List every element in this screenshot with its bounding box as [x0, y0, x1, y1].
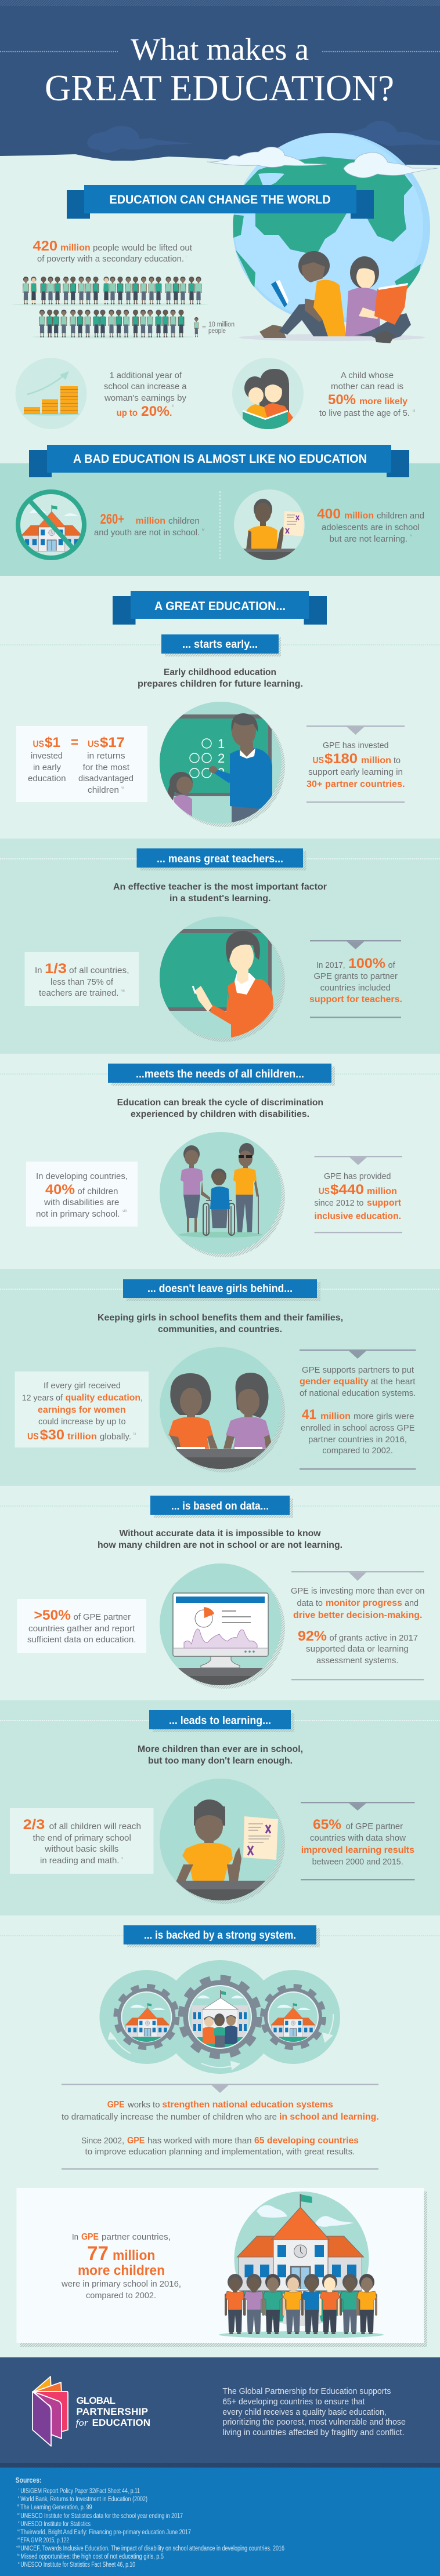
stat: 260 million: 260+ — [100, 511, 124, 527]
stat text: 77 — [87, 2243, 109, 2265]
stat text — [61, 2232, 181, 2301]
callout: GPE strengthens systems: 65 developing countries — [254, 2136, 359, 2146]
subheading — [138, 667, 303, 689]
white clouds — [207, 147, 438, 178]
callout: earnings for women: globally. — [100, 1432, 131, 1442]
stat: 400 million: adolescents are in school — [322, 523, 420, 532]
callout: GPE data investment: drive better decision-making. — [293, 1610, 423, 1620]
source list: vi — [17, 2529, 20, 2533]
source list: viii — [16, 2545, 20, 2549]
callout: children with disabilities — [26, 1162, 138, 1227]
callout: GPE data investment: of grants active in 2017 — [330, 1634, 418, 1643]
callout: gender equality: enrolled in school across GPE — [301, 1424, 415, 1433]
callout: GPE early learning — [306, 725, 405, 803]
callout: children with disabilities: not in primary school. — [36, 1210, 120, 1219]
callout: GPE support for teachers: countries included — [320, 984, 391, 993]
callout: earnings for women: If every girl received — [44, 1381, 121, 1391]
callout: earnings for women: $30 — [40, 1427, 64, 1443]
illustration: child with failed test — [157, 1779, 285, 1904]
callout: GPE inclusive education: inclusive education. — [314, 1211, 401, 1221]
dark cloud right — [340, 121, 440, 146]
illustration: children reading — [239, 251, 425, 343]
ribbon heading: A BAD EDUCATION IS ALMOST LIKE NO EDUCATION — [73, 452, 367, 466]
section: is backed by a strong system — [0, 1925, 440, 2347]
callout: GPE early learning: support early learning in — [308, 768, 403, 777]
stat: mothers who read: more likely — [359, 397, 407, 407]
stat text: partner countries, — [102, 2233, 171, 2242]
section header — [0, 1279, 440, 1301]
callout: GPE data investment: 92% — [298, 1628, 327, 1644]
callout: gender equality: 41 — [302, 1407, 316, 1423]
callout: children with disabilities: of children — [77, 1187, 118, 1196]
callout: investment return: US — [33, 739, 44, 749]
stat: 420 million: 420 — [33, 238, 57, 254]
source list: World Bank, Returns to Investment in Education (2002) — [20, 2496, 147, 2503]
callout: reading and math: in reading and math. — [40, 1856, 120, 1866]
stat: earnings: . — [169, 408, 172, 418]
callout: gender equality: million — [320, 1412, 351, 1421]
callout: GPE strengthens systems: GPE — [127, 2136, 145, 2146]
icon: coins and arrow — [15, 358, 87, 429]
callout: gender equality: compared to 2002. — [322, 1446, 393, 1456]
illustration: teacher at blackboard: 2 — [218, 751, 225, 765]
callout: GPE strengthens systems: strengthen national education systems — [162, 2100, 333, 2110]
callout: investment return: education — [28, 774, 66, 783]
source list: iii — [17, 2504, 19, 2508]
panel: a bad education — [0, 445, 440, 576]
illustration: children with disabilities — [160, 1132, 285, 1257]
callout: improved learning results: improved learning results — [301, 1845, 414, 1855]
callout: data reporting: countries gather and report — [28, 1624, 135, 1634]
callout: GPE support for teachers: support for teachers. — [309, 995, 402, 1004]
callout: earnings for women: , — [140, 1394, 143, 1403]
logo: PARTNERSHIP — [77, 2406, 148, 2417]
stat: 400 million: children and — [377, 511, 424, 521]
section header — [0, 1925, 440, 1947]
subheading: how many children are not in school or are not learning. — [98, 1540, 342, 1550]
callout: earnings for women: earnings for women — [38, 1405, 126, 1415]
stat text: million — [113, 2248, 155, 2263]
callout: improved learning results — [301, 1802, 414, 1880]
subheading: experienced by children with disabilities. — [131, 1109, 309, 1119]
dotted rules — [0, 51, 440, 52]
subheading: Keeping girls in school benefits them and their families, — [98, 1313, 343, 1323]
legend: 10 million people: = — [202, 323, 206, 331]
callout: data reporting: >50% — [34, 1608, 71, 1623]
callout: improved learning results: countries with data show — [310, 1834, 406, 1843]
callout: reading and math: the end of primary school — [33, 1834, 131, 1843]
callout: GPE early learning: GPE has invested — [323, 741, 389, 750]
callout: gender equality: gender equality — [300, 1377, 369, 1387]
callout: children with disabilities: In developing countries, — [36, 1172, 128, 1181]
source list: The Learning Generation, p. 99 — [20, 2504, 92, 2511]
boy — [259, 251, 346, 338]
section header: ... means great teachers... — [157, 853, 283, 865]
source list: UNESCO Institute for Statistics — [20, 2521, 91, 2528]
stat: mothers who read — [319, 371, 415, 418]
illustration: monitor with charts — [157, 1563, 285, 1689]
stat: 420 million: people would be lifted out — [93, 244, 192, 253]
callout: gender equality: partner countries in 2016, — [308, 1435, 407, 1445]
about text — [222, 2386, 406, 2437]
section header: ...meets the needs of all children... — [136, 1068, 304, 1080]
callout: GPE support for teachers: of — [388, 961, 396, 970]
sources heading: Sources: — [16, 2476, 42, 2484]
logo: GLOBAL — [77, 2395, 116, 2406]
callout: GPE inclusive education: million — [367, 1187, 397, 1196]
stat: 420 million: million — [60, 243, 91, 253]
callout: gender equality: GPE supports partners to put — [302, 1366, 414, 1375]
callout: trained teachers: vii — [121, 989, 125, 993]
panel: 77 million more children — [16, 2188, 427, 2347]
area chart — [184, 1629, 257, 1648]
stat text: compared to 2002. — [86, 2291, 156, 2301]
subheading — [138, 1744, 303, 1766]
callout: GPE strengthens systems: GPE — [107, 2100, 125, 2110]
illustration: woman teacher — [157, 916, 285, 1044]
stat text: more children — [78, 2263, 165, 2279]
callout: earnings for women: US — [27, 1432, 39, 1442]
section: meets the needs of all children — [0, 1064, 440, 1257]
callout: investment return: in returns — [87, 752, 125, 761]
callout: GPE strengthens systems: to dramatically increase the number of children who are — [62, 2113, 277, 2122]
source list: ii — [18, 2496, 19, 2499]
stat: mothers who read: iii — [413, 409, 415, 413]
stat: 400 million — [317, 506, 424, 544]
callout: GPE strengthens systems: to improve education planning and implementation, with great results. — [85, 2147, 355, 2157]
section header: ... is backed by a strong system. — [144, 1929, 296, 1942]
callout: reading and math: x — [121, 1857, 123, 1860]
callout: GPE data investment: supported data or learning — [306, 1645, 409, 1654]
stat text: GPE — [81, 2232, 99, 2242]
callout: earnings for women: 12 years of — [22, 1394, 63, 1403]
source list: Missed opportunities: the high cost of not educating girls, p.5 — [20, 2553, 164, 2560]
callout: reading and math: without basic skills — [44, 1845, 118, 1854]
illustration: school and children — [219, 2192, 384, 2338]
subheading: communities, and countries. — [158, 1325, 282, 1334]
stat: earnings: 20% — [141, 404, 169, 419]
callout: investment return — [16, 726, 147, 802]
about text: prioritizing the poorest, most vulnerable and those — [222, 2417, 406, 2427]
callout: investment return: $1 — [45, 735, 60, 750]
panel: means great teachers — [0, 839, 440, 1054]
callout: reading and math: 2/3 — [23, 1817, 45, 1833]
subheading: An effective teacher is the most important factor — [113, 882, 327, 892]
title — [45, 32, 394, 108]
callout: trained teachers: of all countries, — [69, 966, 129, 975]
about text: every child receives a quality basic education, — [222, 2407, 387, 2417]
stat: 400 million: but are not learning. — [330, 535, 407, 544]
callout: data reporting: of GPE partner — [74, 1613, 131, 1622]
callout: investment return: for the most — [83, 763, 129, 772]
section: starts early — [0, 634, 440, 827]
ribbon heading: a great education: A GREAT EDUCATION... — [154, 600, 286, 613]
callout: GPE inclusive education: US — [319, 1187, 330, 1196]
callout: investment return: = — [71, 735, 78, 750]
callout: improved learning results: of GPE partner — [346, 1822, 403, 1831]
callout: data reporting — [17, 1599, 146, 1653]
source list: iv — [17, 2513, 20, 2516]
section header: ... doesn't leave girls behind... — [147, 1283, 293, 1295]
about text: living in countries affected by fragility and conflict. — [222, 2428, 405, 2437]
gear: ministry with people — [181, 1978, 259, 2056]
pie chart — [195, 1607, 214, 1627]
subheading: but too many don't learn enough. — [148, 1756, 293, 1766]
callout: trained teachers: In — [35, 966, 42, 975]
stat: earnings: 1 additional year of — [109, 371, 182, 380]
callout: GPE data investment: GPE is investing more than ever on — [291, 1587, 424, 1596]
ribbon heading — [67, 185, 374, 219]
callout: GPE data investment: assessment systems. — [316, 1656, 398, 1666]
stat: mothers who read: 50% — [328, 392, 356, 408]
pictogram: people rows — [12, 277, 209, 339]
source list: UIS/GEM Report Policy Paper 32/Fact Sheet 44, p.11 — [20, 2488, 140, 2495]
stat: earnings: ii — [172, 405, 174, 408]
callout: GPE inclusive education: support — [367, 1198, 402, 1208]
subheading: Without accurate data it is impossible to know — [120, 1529, 321, 1539]
legend: 10 million people — [194, 317, 235, 337]
callout: trained teachers: 1/3 — [45, 961, 67, 977]
source list: x — [18, 2562, 20, 2565]
callout: improved learning results: 65% — [313, 1817, 341, 1833]
subheading — [113, 882, 327, 904]
source list: Theirworld, Bright And Early: Financing pre-primary education June 2017 — [20, 2529, 191, 2536]
panel: footer about GPE — [0, 2357, 440, 2468]
callout: investment return: children — [88, 786, 119, 795]
callout: investment return: in early — [33, 763, 62, 772]
section header: ... is based on data... — [171, 1500, 269, 1512]
callout: gender equality: more girls were — [354, 1412, 414, 1421]
gear: school left — [116, 1986, 177, 2048]
stat: 400 million: million — [344, 511, 374, 521]
stat: mothers who read: to live past the age of 5. — [319, 409, 410, 418]
callout: investment return: US — [88, 739, 99, 749]
illustration: teacher at blackboard — [157, 702, 285, 827]
callout: gender equality: at the heart — [371, 1377, 416, 1387]
subheading: in a student's learning. — [169, 894, 271, 904]
stat: 260 million: children — [168, 517, 200, 526]
callout: GPE strengthens systems: works to — [127, 2100, 160, 2110]
callout: GPE data investment: and — [405, 1599, 419, 1608]
callout: gender equality — [300, 1349, 416, 1470]
icon: no school — [18, 492, 84, 558]
source list — [16, 2488, 284, 2568]
illustration: gears — [99, 1960, 340, 2074]
gear: school right — [262, 1986, 324, 2048]
callout: gender equality: of national education systems. — [300, 1389, 416, 1398]
panel: sources — [0, 2468, 440, 2576]
girl — [345, 256, 411, 343]
arrows — [109, 2014, 333, 2069]
callout: GPE support for teachers: GPE grants to partner — [313, 972, 398, 981]
callout: investment return: invested — [31, 752, 63, 761]
section: is based on data — [0, 1496, 440, 1689]
stat: mothers who read: mother can read is — [331, 382, 403, 391]
ribbon heading: a great education — [113, 591, 327, 625]
subheading: Early childhood education — [164, 667, 276, 677]
callout: earnings for women: ix — [134, 1432, 136, 1436]
callout: GPE early learning: million — [361, 756, 391, 765]
callout: earnings for women: could increase by up to — [38, 1417, 126, 1427]
callout: GPE inclusive education: GPE has provided — [324, 1172, 391, 1181]
callout: GPE data investment: data to — [297, 1599, 323, 1608]
callout: GPE strengthens systems: has worked with more than — [147, 2136, 252, 2146]
subheading: More children than ever are in school, — [138, 1744, 303, 1754]
callout: GPE early learning: $180 — [324, 751, 358, 767]
subheading — [117, 1098, 323, 1119]
source list: ix — [17, 2553, 20, 2557]
about text: The Global Partnership for Education supports — [222, 2386, 391, 2396]
callout: GPE support for teachers — [309, 940, 402, 1018]
panel: doesn't leave girls behind — [0, 1269, 440, 1486]
section header — [0, 634, 440, 656]
source list: v — [18, 2521, 20, 2524]
illustration: teacher at blackboard: 1 — [218, 736, 225, 751]
callout: investment return: vi — [121, 786, 124, 790]
callout: GPE inclusive education: since 2012 to — [314, 1199, 363, 1208]
illustration: teacher at blackboard: 3 — [218, 765, 225, 780]
panel: leads to learning — [0, 1700, 440, 1915]
illustration: two girls — [157, 1347, 285, 1473]
callout: reading and math: of all children will reach — [49, 1822, 141, 1831]
section header — [0, 1710, 440, 1732]
callout: children with disabilities: 40% — [45, 1182, 75, 1198]
source list: EFA GMR 2015, p.122 — [20, 2537, 69, 2544]
stat: earnings: school can increase a — [104, 382, 187, 391]
stat: mothers who read: A child whose — [341, 371, 394, 380]
callout: children with disabilities: viii — [122, 1210, 127, 1213]
source list: vii — [17, 2537, 20, 2541]
callout: GPE inclusive education: $440 — [330, 1182, 364, 1198]
callout: GPE support for teachers: 100% — [348, 956, 385, 971]
stat: 260 million: and youth are not in school. — [94, 528, 200, 538]
callout: trained teachers: less than 75% of — [51, 978, 114, 987]
callout: trained teachers — [24, 952, 139, 1006]
legend: 10 million people: 10 million — [208, 321, 235, 328]
subheading: prepares children for future learning. — [138, 679, 303, 689]
callout: improved learning results: between 2000 and 2015. — [312, 1857, 403, 1867]
stat: 260 million — [94, 511, 204, 538]
stat: 260 million: million — [136, 516, 165, 526]
subheading: Education can break the cycle of discrimination — [117, 1098, 323, 1108]
stat: 420 million — [33, 238, 192, 264]
about text: 65+ developing countries to ensure that — [222, 2397, 365, 2407]
stat: earnings: up to — [117, 408, 138, 418]
callout: earnings for women — [15, 1372, 149, 1447]
subheading — [98, 1529, 342, 1550]
callout: data reporting: sufficient data on education. — [27, 1635, 136, 1645]
ribbon heading — [29, 445, 409, 477]
callout: GPE support for teachers: In 2017, — [316, 961, 345, 970]
ribbon heading: EDUCATION CAN CHANGE THE WORLD — [109, 193, 331, 206]
source list: UNICEF, Towards Inclusive Education. The impact of disability on school attendance in developing countries. 2016 — [20, 2545, 284, 2552]
callout: GPE early learning: US — [312, 756, 324, 765]
source list: UNESCO Institute for Statistics Fact Sheet 46, p.10 — [20, 2562, 135, 2568]
section header — [0, 848, 440, 870]
source list: UNESCO Institute for Statistics data for the school year ending in 2017 — [20, 2513, 183, 2520]
callout: GPE data investment: monitor progress — [326, 1598, 402, 1608]
dark cloud left — [87, 126, 194, 153]
section: education can change the world — [12, 185, 415, 432]
section header — [0, 1496, 440, 1518]
callout: GPE early learning: to — [394, 756, 401, 765]
icon: mother reading with child — [232, 358, 304, 432]
callout: GPE data investment — [291, 1571, 424, 1680]
callout: trained teachers: teachers are trained. — [39, 989, 118, 998]
callout: earnings for women: trillion — [67, 1432, 97, 1442]
section header — [0, 1064, 440, 1086]
callout: GPE strengthens systems: in school and learning. — [279, 2112, 379, 2122]
stat text: were in primary school in 2016, — [61, 2280, 181, 2289]
callout: reading and math — [10, 1808, 153, 1874]
logo — [33, 2377, 150, 2446]
callout: GPE strengthens systems: Since 2002, — [81, 2136, 124, 2146]
section header: ... starts early... — [182, 638, 258, 651]
section header: ... leads to learning... — [169, 1715, 271, 1727]
stat text: In — [72, 2233, 78, 2242]
subheading — [98, 1313, 343, 1334]
callout: investment return: disadvantaged — [78, 774, 134, 783]
logo: for — [75, 2417, 88, 2428]
legend: 10 million people: people — [208, 328, 226, 335]
callout: GPE strengthens systems — [62, 2084, 379, 2169]
stat: 260 million: iv — [202, 528, 204, 532]
stat: 400 million: v — [410, 534, 412, 538]
callout: children with disabilities: with disabilities are — [44, 1198, 119, 1207]
title: What makes a — [131, 32, 309, 67]
panel: header — [0, 0, 440, 168]
illustration: globe — [233, 133, 430, 323]
callout: GPE inclusive education — [314, 1156, 402, 1233]
logo: EDUCATION — [92, 2417, 150, 2428]
icon: child with failed test — [234, 489, 305, 563]
stat: earnings — [104, 371, 187, 419]
stat: 400 million: 400 — [317, 506, 341, 522]
stat: 420 million: of poverty with a secondary education. — [37, 255, 184, 264]
callout: investment return: $17 — [100, 735, 125, 750]
stat: earnings: woman's earnings by — [104, 394, 187, 403]
callout: earnings for women: quality education — [66, 1393, 140, 1403]
callout: GPE early learning: 30+ partner countries. — [306, 779, 405, 789]
title: GREAT EDUCATION? — [45, 67, 394, 108]
